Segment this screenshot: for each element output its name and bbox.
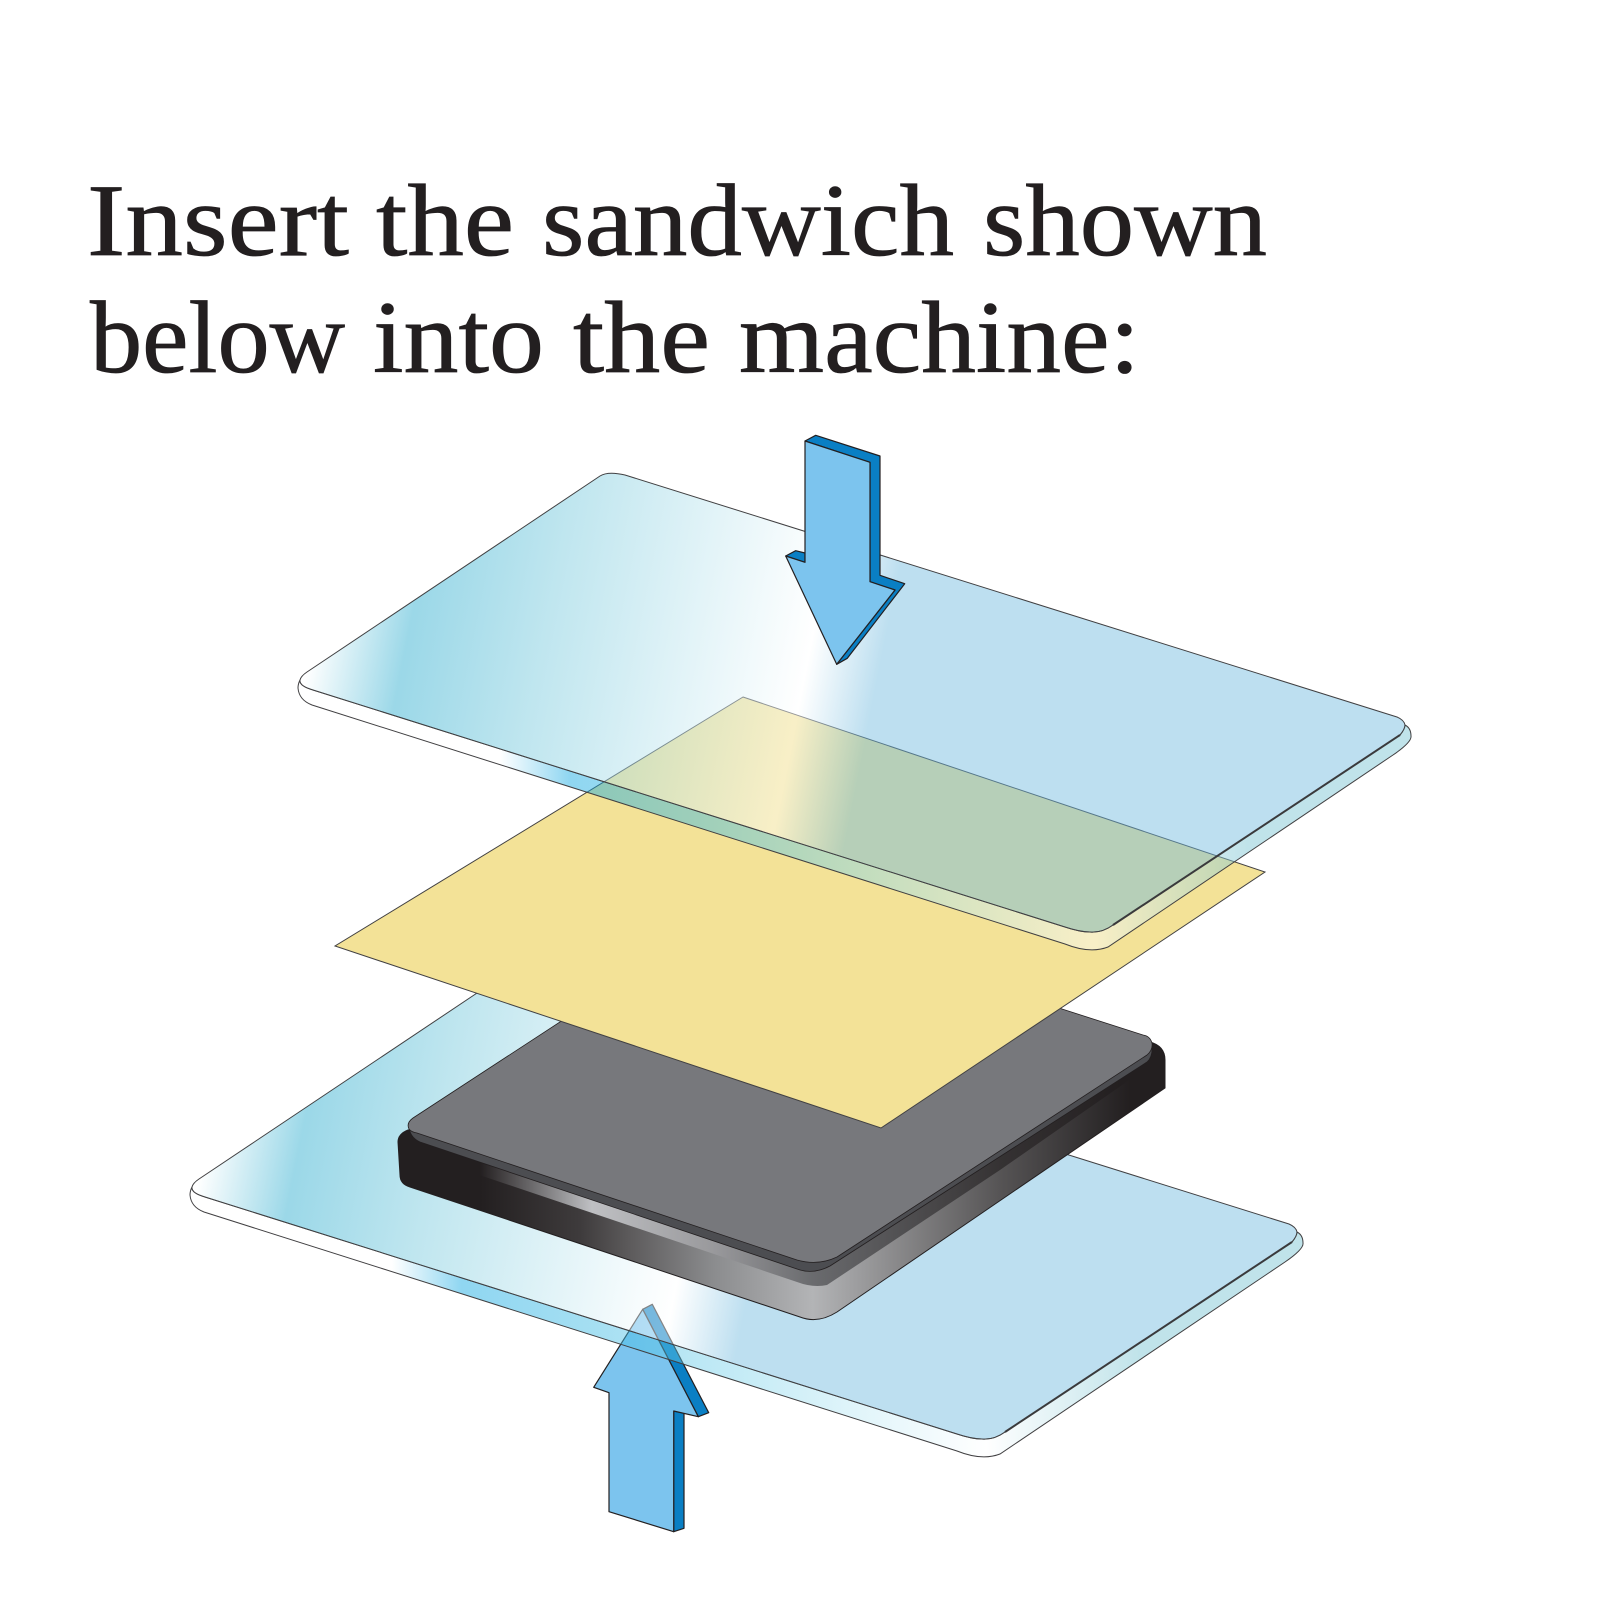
black press block bbox=[398, 905, 1165, 1320]
arrow: upward pressure bbox=[594, 1304, 709, 1532]
title: the bbox=[376, 164, 514, 278]
title: below bbox=[90, 281, 345, 395]
block top plate bbox=[408, 905, 1152, 1262]
block middle layer bbox=[409, 1045, 1152, 1286]
title: into bbox=[373, 281, 544, 395]
block lip bbox=[409, 1045, 1152, 1271]
title bbox=[87, 164, 1267, 395]
block base bbox=[398, 1042, 1165, 1320]
title: sandwich bbox=[542, 164, 954, 278]
arrow: downward pressure bbox=[786, 435, 905, 664]
bottom glass plate bbox=[190, 980, 1303, 1457]
top glass plate bbox=[298, 473, 1411, 950]
title: machine: bbox=[739, 281, 1140, 395]
title: shown bbox=[983, 164, 1267, 278]
title: Insert bbox=[87, 164, 349, 278]
yellow paper sheet bbox=[335, 697, 1265, 1128]
title: the bbox=[573, 281, 710, 395]
